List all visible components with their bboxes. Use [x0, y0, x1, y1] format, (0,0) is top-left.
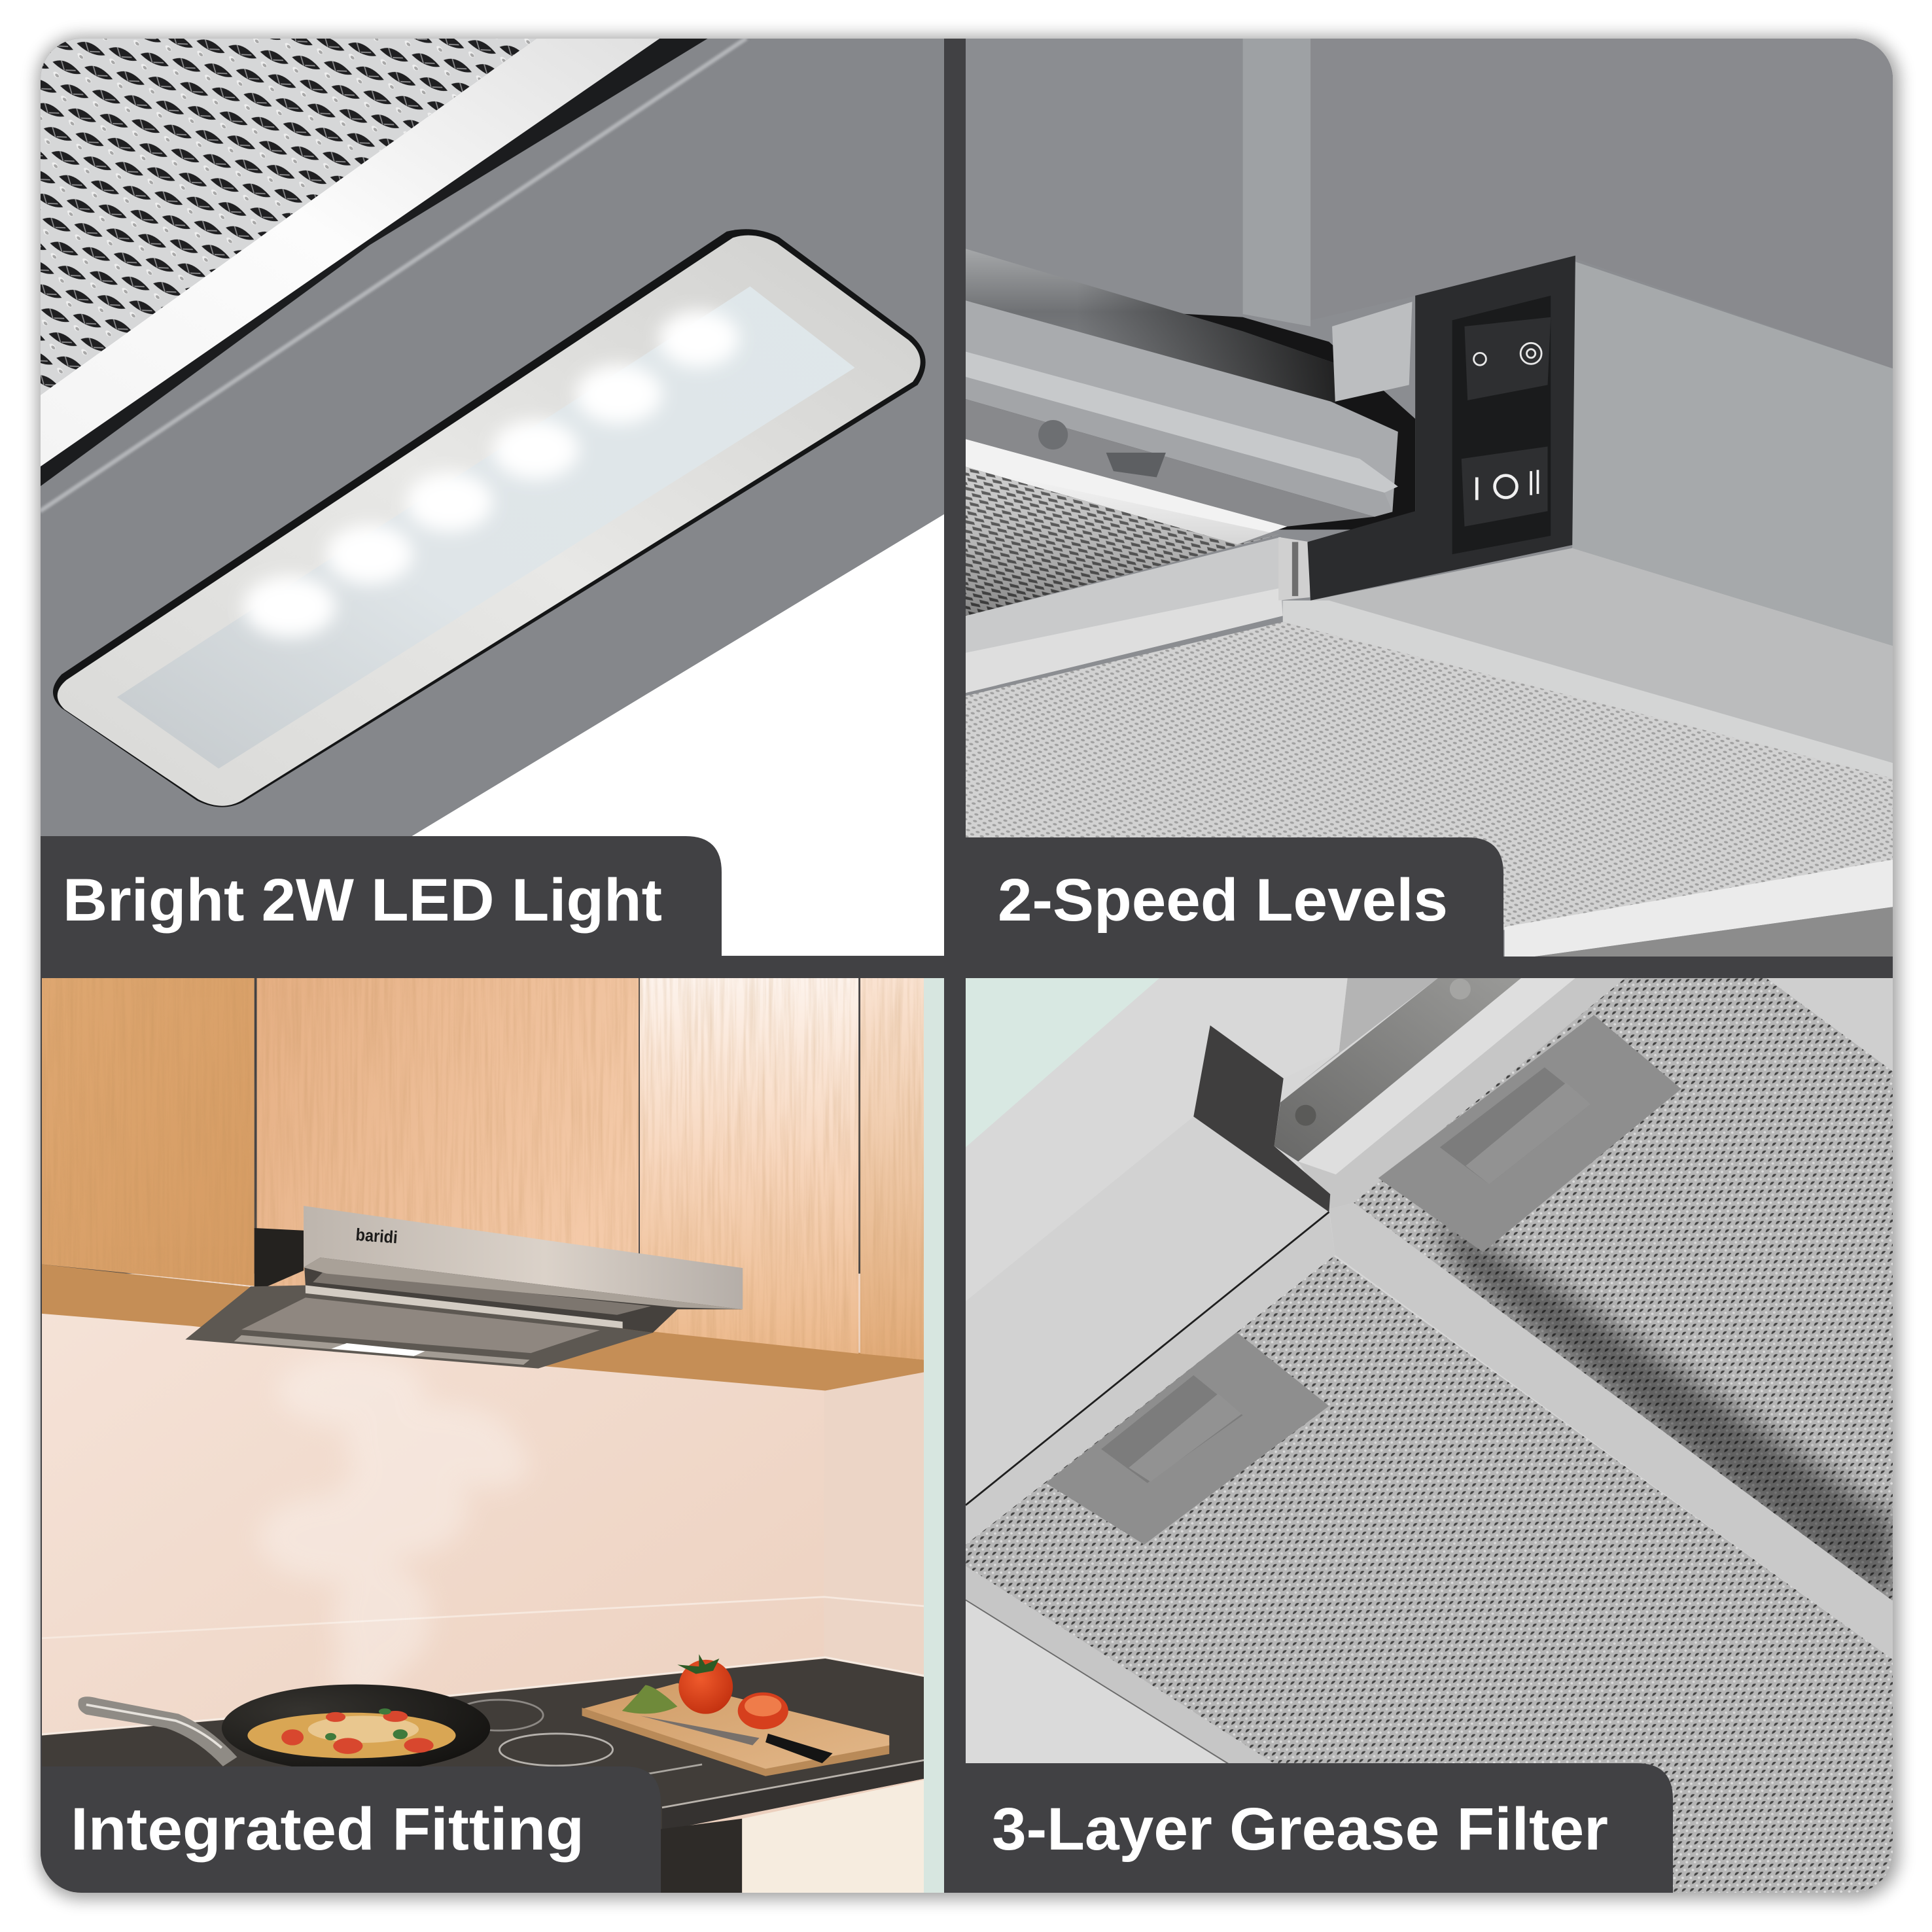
cutting board with food	[582, 1654, 889, 1776]
brand name: baridi	[355, 1225, 398, 1247]
label: Bright 2W LED Light: Bright 2W LED Light	[63, 867, 662, 934]
lower frame	[966, 1566, 1274, 1766]
panel: bright LED light	[40, 38, 944, 956]
switch bracket	[1307, 256, 1575, 601]
light switch	[1464, 317, 1551, 400]
right housing face	[1572, 262, 1895, 646]
dividers	[944, 39, 966, 1893]
LED module	[53, 229, 926, 807]
front filter tab	[1045, 1332, 1329, 1545]
cooker hood	[185, 1206, 743, 1369]
left housing	[966, 978, 1348, 1545]
panel: mint strip	[924, 978, 944, 1893]
rear filter mesh	[1354, 978, 1895, 1603]
filter frame	[40, 38, 660, 467]
wall	[42, 1274, 924, 1895]
left filter mesh	[966, 467, 1280, 616]
label: Bright 2W LED Light	[40, 836, 722, 957]
label: 3-Layer Grease Filter: 3-Layer Grease Filter	[992, 1796, 1608, 1863]
steam	[258, 1354, 530, 1705]
label: Integrated Fitting: Integrated Fitting	[71, 1796, 584, 1863]
label: 2-Speed Levels	[966, 837, 1503, 958]
panel: two speed levels	[966, 38, 1895, 962]
rear wall	[1310, 38, 1895, 370]
label: 2-Speed Levels: 2-Speed Levels	[998, 867, 1448, 934]
label: Integrated Fitting	[40, 1766, 661, 1893]
label: 3-Layer Grease Filter	[966, 1763, 1673, 1893]
panel: integrated fitting kitchen scene	[42, 978, 924, 1895]
rear filter tab	[1379, 1015, 1681, 1252]
countertop	[42, 1659, 924, 1895]
bottom face and front mesh	[1310, 548, 1895, 764]
rail assembly	[966, 249, 1415, 544]
frying pan	[78, 1684, 490, 1772]
panel: grease filter	[966, 978, 1895, 1895]
speed switch	[1462, 446, 1548, 527]
filter mesh	[40, 38, 537, 395]
centre frame	[1329, 1203, 1895, 1662]
front filter mesh	[966, 1255, 1895, 1895]
cabinets	[42, 978, 924, 1390]
